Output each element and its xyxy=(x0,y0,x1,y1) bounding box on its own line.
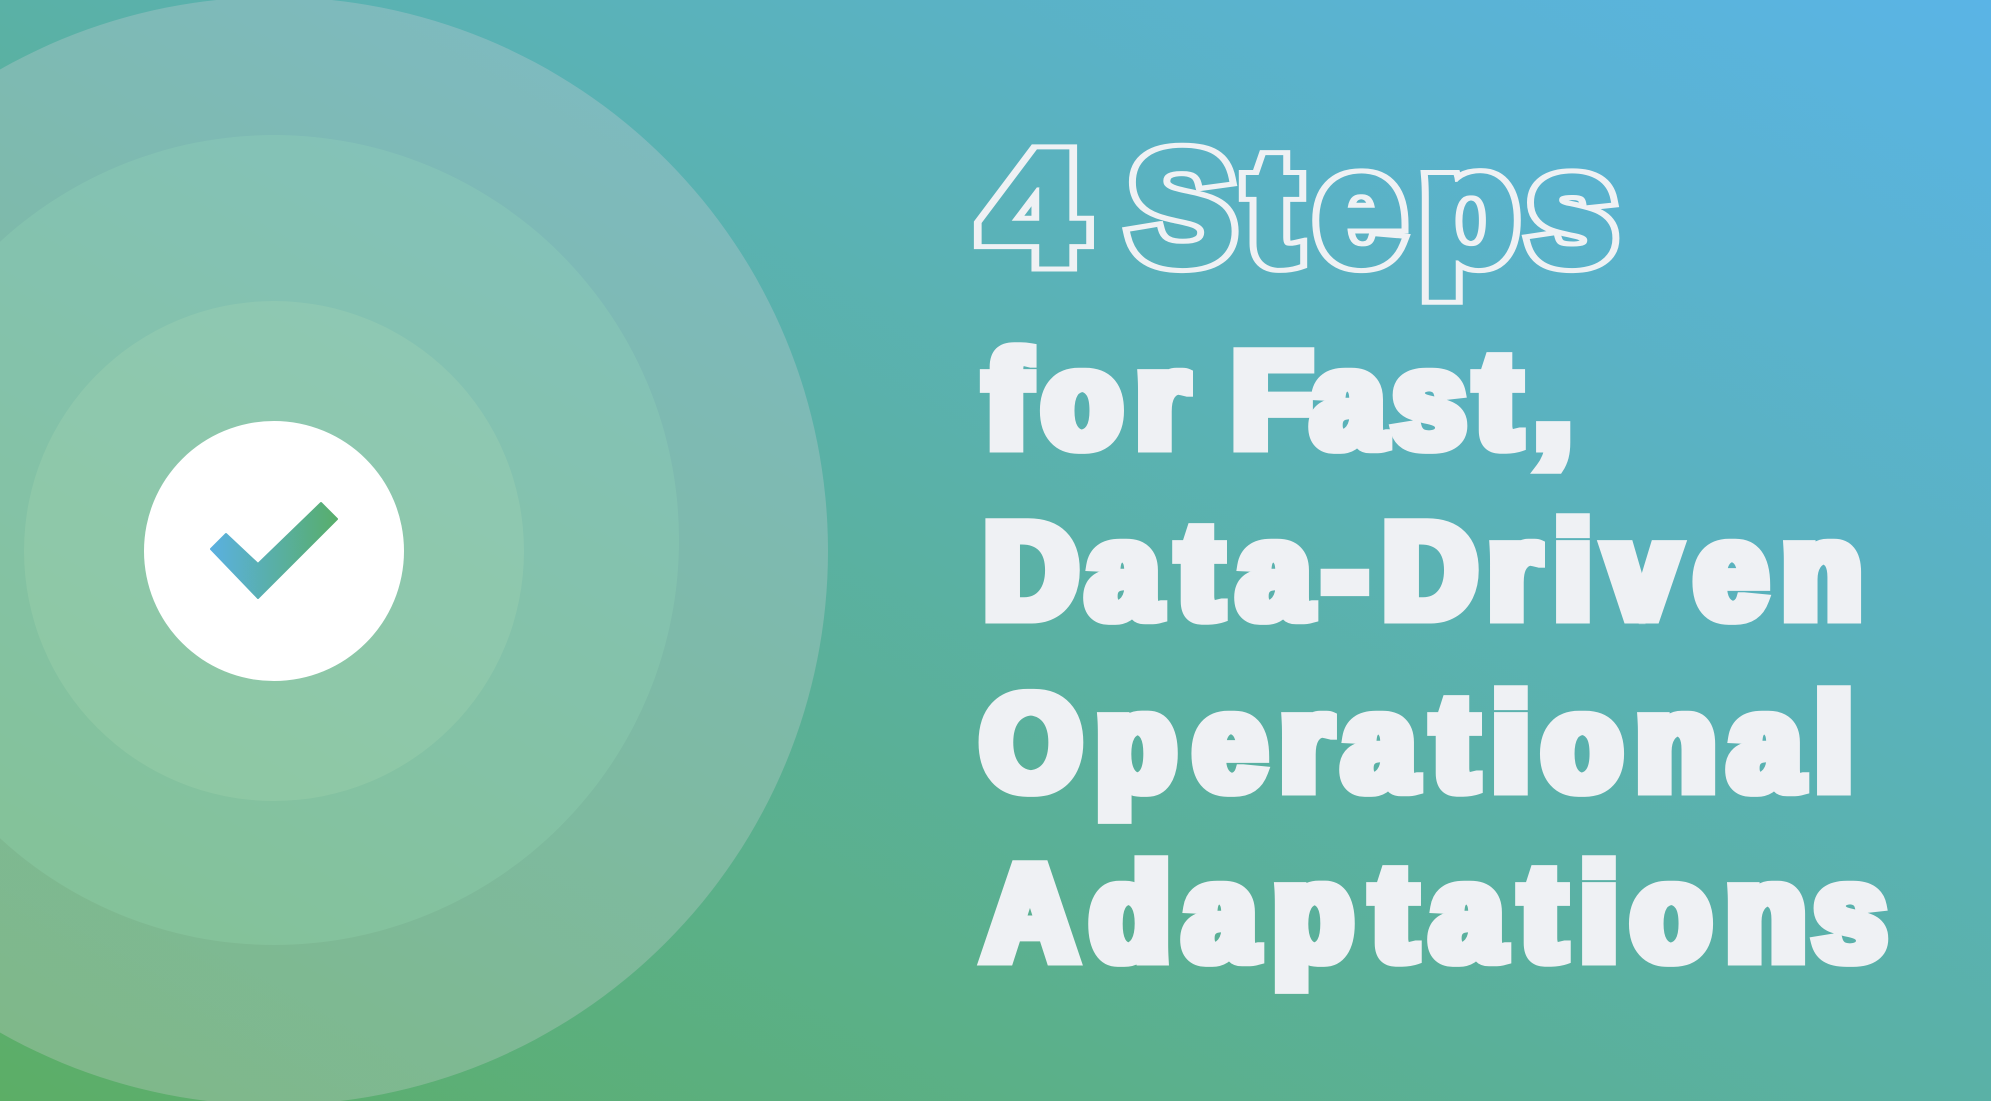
white centre circle xyxy=(144,421,404,681)
title line: outlined 4 Steps: 4 xyxy=(982,118,1084,297)
title line: Adaptations: Adaptations xyxy=(984,837,1885,990)
title line: Operational: Operational xyxy=(981,667,1852,820)
title line: for Fast,: for Fast, xyxy=(986,324,1571,477)
third circle xyxy=(24,301,524,801)
icon: check mark xyxy=(211,503,337,598)
title xyxy=(981,118,1885,990)
title line: Data-Driven: Data-Driven xyxy=(985,495,1861,648)
outer circle xyxy=(0,0,828,1101)
title line: outlined 4 Steps: Steps xyxy=(1129,118,1616,297)
second circle xyxy=(0,135,679,945)
concentric circles graphic xyxy=(0,0,828,1101)
